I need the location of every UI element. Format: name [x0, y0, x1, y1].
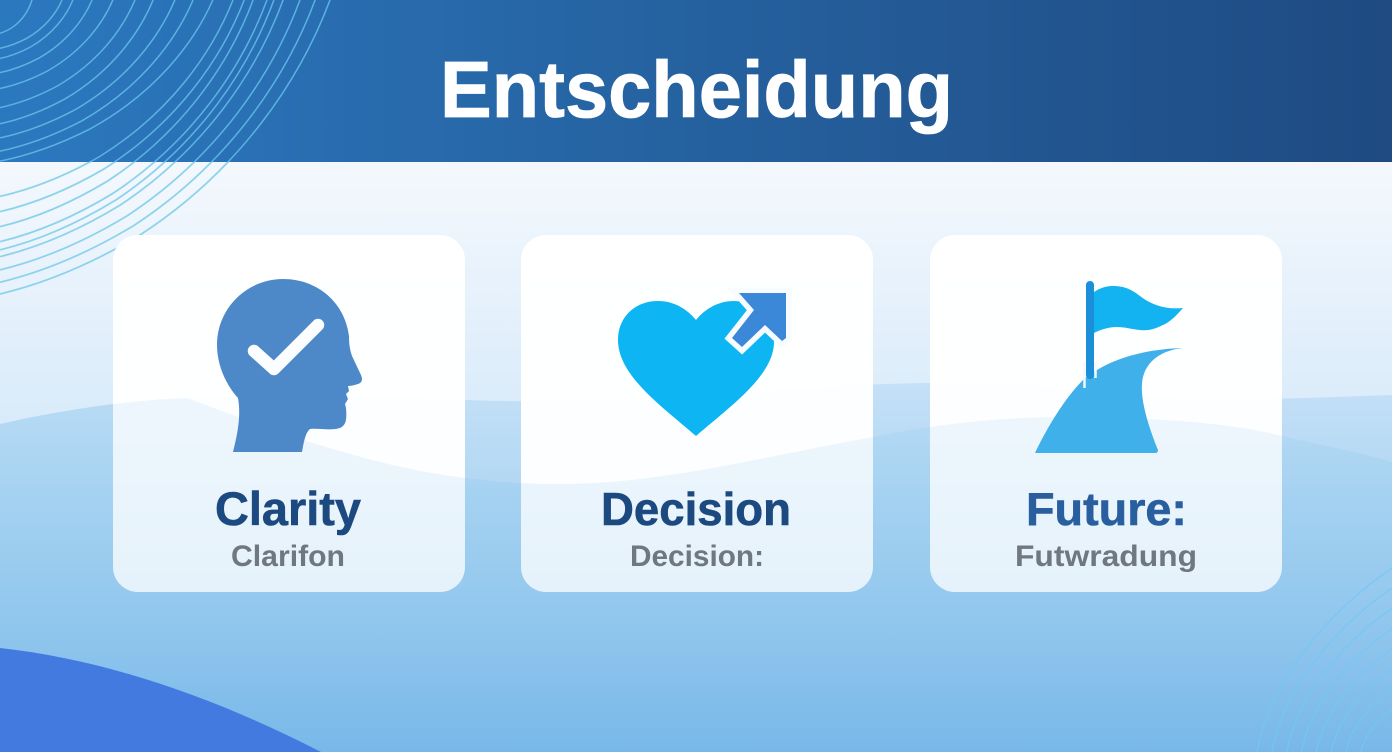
panel: clarity [215, 279, 362, 573]
subtitle: decision: Decision: [630, 540, 764, 573]
decorative arcs: bottom right [1257, 568, 1392, 752]
subtitle: futwradung: Futwradung [1015, 540, 1197, 573]
title: Entscheidung [440, 45, 953, 134]
decorative arcs: top left [0, 0, 330, 294]
heading: clarity: Clarity [215, 482, 361, 535]
heading: decision: Decision [601, 483, 791, 535]
panel: decision [601, 293, 791, 573]
panel: future [1015, 281, 1197, 573]
header band [0, 0, 1392, 162]
background wave: light back layer [0, 383, 1392, 752]
icon: head with checkmark [217, 279, 362, 452]
background blob: bottom left [0, 648, 321, 752]
page background [0, 162, 1392, 752]
heading: future: Future: [1026, 483, 1187, 535]
subtitle: clarifon: Clarifon [231, 540, 345, 573]
panel: card surfaces [113, 235, 1282, 592]
icon: flag on hill [1035, 281, 1183, 453]
icon: heart with arrow [618, 293, 786, 436]
background wave: deep front layer [0, 398, 1392, 752]
